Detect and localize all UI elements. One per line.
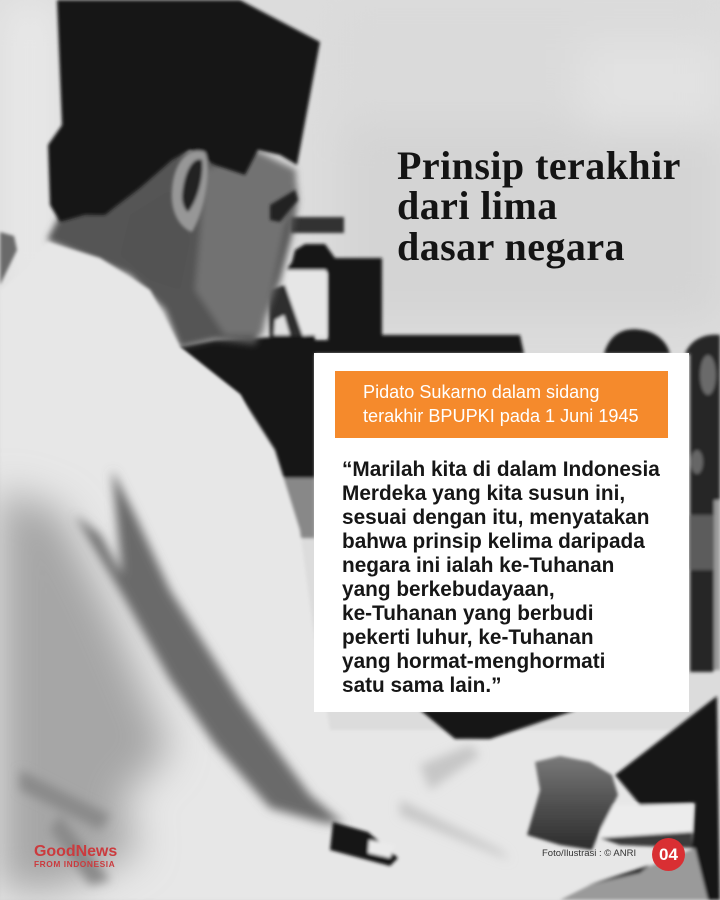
far background structure [268,217,524,354]
sleeve folds [400,745,510,860]
banner text [363,382,639,426]
dark object at bottom center [330,822,398,866]
logo wordmark: GoodNews [34,843,117,860]
microphone [527,756,618,850]
logo tagline: FROM INDONESIA [34,859,115,869]
lower-right table [420,696,720,900]
quote text: pekerti luhur, ke-Tuhanan [342,626,594,649]
orange subtitle banner [335,371,668,438]
quote text: bahwa prinsip kelima daripada [342,530,645,553]
coat fold [75,470,345,825]
quote text: negara ini ialah ke-Tuhanan [342,554,614,577]
coat shading [0,490,170,890]
left edge figure [0,232,17,285]
neck and face [47,150,298,348]
page number badge [652,838,685,871]
page number badge: 04 [659,845,678,864]
dark area below the neck [178,335,315,478]
photo credit: Foto/Ilustrasi : © ANRI [542,848,636,859]
banner text: Pidato Sukarno dalam sidang [363,382,599,402]
quote text: “Marilah kita di dalam Indonesia [342,458,660,481]
quote text: ke-Tuhanan yang berbudi [342,602,594,625]
title: dari lima [397,183,558,228]
quote text: yang berkebudayaan, [342,578,555,601]
hat and hair [48,0,320,222]
background people at right [604,329,720,672]
quote text: yang hormat-menghormati [342,650,605,673]
quote text: sesuai dengan itu, menyatakan [342,506,649,529]
quote text: Merdeka yang kita susun ini, [342,482,625,505]
quote text: satu sama lain.” [342,674,502,697]
gray strip beside coat [275,478,315,538]
title: dasar negara [397,224,625,269]
eye shadow [270,190,298,222]
panel: quote card [314,353,689,712]
banner text: terakhir BPUPKI pada 1 Juni 1945 [363,406,639,426]
logo: GoodNews from Indonesia [34,843,117,869]
ear [172,151,208,232]
title: Prinsip terakhir [397,143,681,188]
white coat [0,242,720,900]
quote text [342,458,660,697]
title [397,143,681,269]
